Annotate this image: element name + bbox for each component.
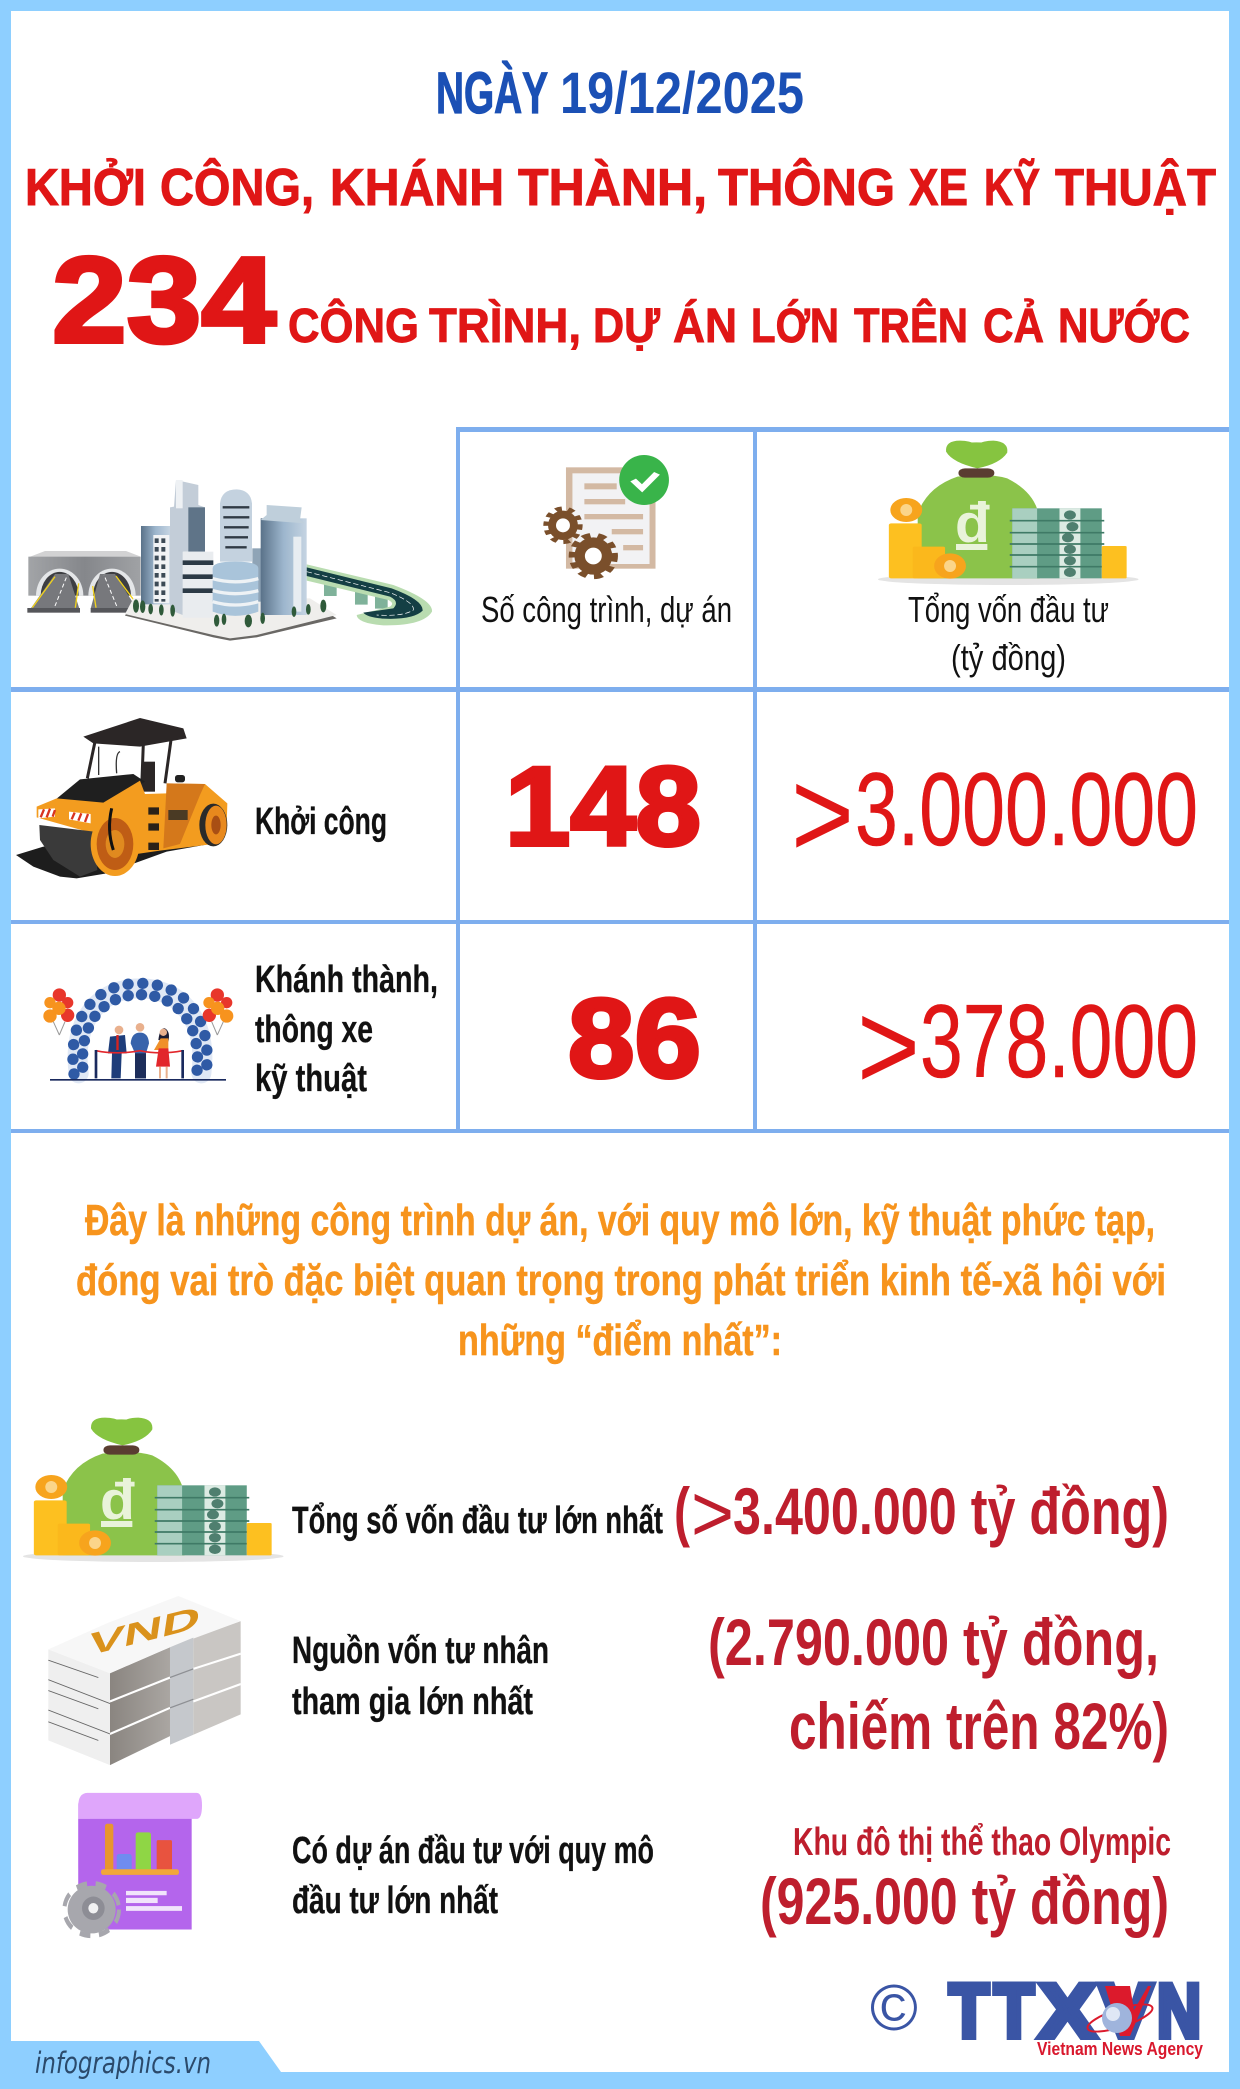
value: over 378,000: > [857, 977, 920, 1116]
logo: TTXVN Vietnam News Agency [949, 1969, 1203, 2059]
heading: main title line 1: THÔNG [718, 158, 895, 217]
value: over 3,000,000: > [791, 745, 854, 884]
row label: Khánh thành, thông xe kỹ thuật: kỹ thuật [255, 1058, 367, 1100]
heading: main title line 2: LỚN [751, 298, 839, 353]
icon: ribbon cutting under a balloon arch [43, 983, 233, 1081]
value: over 378,000 [857, 977, 1198, 1116]
heading: main title line 2: TRÌNH, [429, 299, 581, 353]
orange summary paragraph [76, 1196, 1166, 1365]
icon: purple chart scroll with gear [64, 1793, 202, 1936]
heading: main title line 2: ÁN [673, 299, 737, 353]
icon: document with gears and check mark [547, 455, 669, 577]
value: over 3,000,000 [791, 745, 1198, 884]
logo: TTXVN Vietnam News Agency: V [1099, 1969, 1153, 2054]
heading: main title line 2: CẢ [983, 298, 1044, 353]
heading: main title line 2: NƯỚC [1058, 298, 1190, 353]
highlight 3 label: đầu tư lớn nhất [292, 1880, 498, 1922]
icon: money bag, highlight 1: đ [100, 1469, 135, 1532]
table header: number of projects: Số công trình, dự án [481, 589, 732, 630]
logo: TTXVN Vietnam News Agency: N [1157, 1969, 1201, 2054]
heading: main title line 1: THUẬT [1055, 158, 1216, 217]
highlight 1 label: Tổng số vốn đầu tư lớn nhất [292, 1500, 663, 1542]
icon: VND banknote stack: VND [86, 1599, 203, 1664]
logo: TTXVN Vietnam News Agency: T [949, 1969, 989, 2054]
orange summary paragraph: những “điểm nhất”: [458, 1316, 782, 1365]
table header: total investment [908, 589, 1109, 678]
highlight 3 label: Có dự án đầu tư với quy mô [292, 1830, 654, 1872]
heading: main title line 1: THÀNH, [518, 159, 707, 217]
value: 148 projects: 148 [505, 744, 701, 869]
highlight 2 label: tham gia lớn nhất [292, 1681, 533, 1723]
heading: main title line 2: DỰ [593, 300, 660, 353]
row label: Khánh thành, thông xe kỹ thuật: thông xe [255, 1009, 373, 1051]
logo: TTXVN Vietnam News Agency: X [1039, 1969, 1096, 2054]
logo: TTXVN Vietnam News Agency: Vietnam News Agency [1037, 2039, 1203, 2059]
heading: main title line 1: KỸ [984, 158, 1040, 217]
footer tab: infographics.vn [0, 2041, 281, 2089]
table header: total investment: (tỷ đồng) [951, 637, 1066, 678]
row label: Khánh thành, thông xe kỹ thuật: Khánh thành, [255, 959, 438, 1001]
icon: city buildings, tunnel and overpass [27, 480, 432, 641]
highlight 1 value: ( [674, 1474, 690, 1548]
icon: money bag with coins and banknotes [878, 441, 1139, 585]
highlight 2 value [708, 1605, 1169, 1763]
highlight 1 value: > [691, 1469, 734, 1559]
footer tab: infographics.vn: infographics.vn [35, 2046, 211, 2080]
icon: money bag with coins and banknotes: đ [955, 492, 990, 555]
heading: date: 19/12/2025 [560, 61, 804, 126]
heading: main title line 2: TRÊN [854, 298, 968, 353]
copyright symbol: © [870, 1971, 918, 2044]
heading: main title line 2 [288, 298, 1190, 353]
heading: date: NGÀY [436, 61, 548, 126]
heading: main title line 1: CÔNG, [160, 158, 314, 217]
heading: main title line 1: XE [909, 159, 968, 217]
highlight 1 value [674, 1469, 1169, 1559]
logo: TTXVN Vietnam News Agency: T [994, 1969, 1034, 2054]
heading: main title line 2: CÔNG [288, 298, 419, 353]
table grid [11, 427, 1229, 1133]
icon: VND banknote stack [48, 1596, 241, 1765]
heading: main title line 1: KHỞI [25, 158, 146, 217]
value: 86 projects: 86 [568, 976, 701, 1101]
icon: road roller [16, 718, 227, 878]
icon: money bag, highlight 1 [23, 1418, 284, 1562]
row label: Khởi công: Khởi công [255, 801, 387, 843]
heading: big number 234: 234 [52, 232, 276, 368]
heading: main title line 1: KHÁNH [330, 159, 504, 217]
row label: Khánh thành, thông xe kỹ thuật [255, 959, 438, 1100]
highlight 3 value [760, 1821, 1171, 1938]
highlight 2 label: Nguồn vốn tư nhân [292, 1630, 549, 1672]
table header: total investment: Tổng vốn đầu tư [908, 589, 1109, 630]
highlight 3 label [292, 1830, 654, 1922]
highlight 2 label [292, 1630, 549, 1723]
heading: main title line 1 [25, 158, 1216, 217]
heading: date [436, 61, 804, 126]
